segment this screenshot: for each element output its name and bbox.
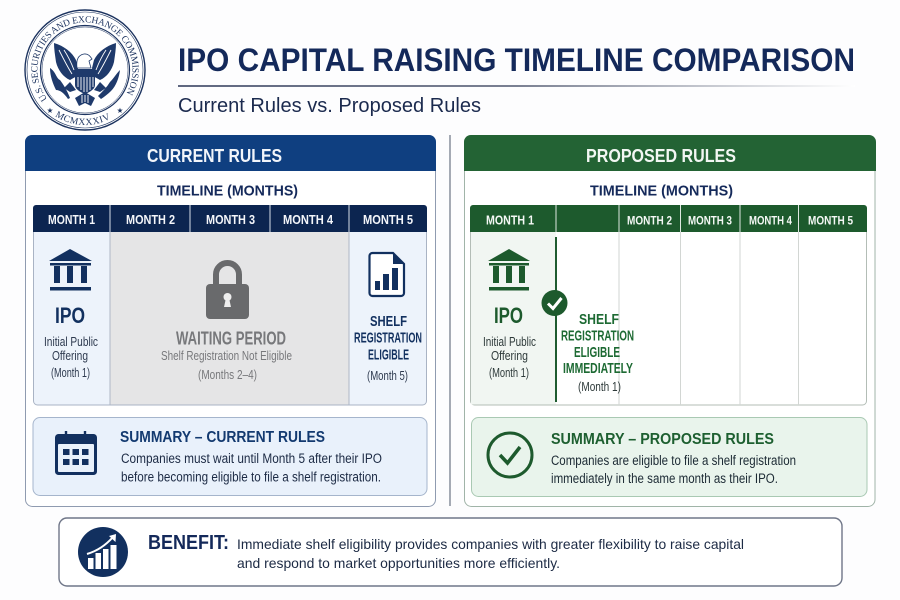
summary: proposed rules: Companies are eligible to file a shelf registration [551,453,796,468]
callout: benefit: Immediate shelf eligibility provides companies with greater flexibility to raise capital [237,536,744,552]
waiting period label: WAITING PERIOD [176,328,286,348]
panel: current rules [25,135,436,506]
heading: timeline: TIMELINE (MONTHS) [590,182,733,200]
header: proposed rules: PROPOSED RULES [586,145,736,166]
eagle [50,43,120,106]
month header bar [470,205,867,232]
waiting period label [161,328,292,382]
shelf eligible label: SHELF [370,313,407,330]
IPO label: Initial Public [483,335,536,349]
icon: bank [488,249,530,290]
month header bar: MONTH 2 [126,213,175,227]
callout: benefit [59,518,842,586]
shelf eligible immediately label [561,311,634,394]
shelf eligible label: (Month 5) [367,369,408,383]
header: proposed rules [464,135,876,171]
month header bar: MONTH 5 [363,213,413,227]
shelf eligible label: ELIGIBLE [368,346,409,364]
header: current rules [25,135,436,171]
shelf eligible immediately label: IMMEDIATELY [563,360,633,377]
logo: SEC seal: ★ [117,106,124,115]
subtitle: Current Rules vs. Proposed Rules [178,94,481,117]
month header bar: MONTH 1 [48,213,95,227]
shelf eligible immediately label: ELIGIBLE [574,344,620,361]
heading: timeline: TIMELINE (MONTHS) [157,182,298,200]
IPO label: (Month 1) [489,366,529,380]
summary: proposed rules: SUMMARY – PROPOSED RULES [551,431,774,448]
icon: document chart [370,253,404,296]
shelf eligible immediately label: (Month 1) [578,380,621,394]
month header bar [33,205,427,232]
month header bar: MONTH 4 [749,214,792,228]
IPO label [483,303,536,380]
summary: proposed rules [472,418,867,496]
month header bar: MONTH 3 [688,214,732,228]
callout: benefit: and respond to market opportunities more efficiently. [237,555,560,571]
icon: padlock [206,263,249,319]
summary: current rules: SUMMARY – CURRENT RULES [120,429,325,446]
summary: current rules: Companies must wait until Month 5 after their IPO [121,451,382,466]
month header bar: MONTH 1 [486,214,534,228]
icon: growth chart [78,527,128,577]
summary: proposed rules: immediately in the same month as their IPO. [551,471,778,486]
logo: SEC seal: ★ [47,106,54,115]
logo: SEC seal: MCMXXXIV [55,110,108,126]
month header bar: MONTH 4 [283,213,333,227]
IPO label [44,303,98,380]
icon: bank [49,249,92,290]
waiting period label: Shelf Registration Not Eligible [161,348,292,363]
panel: proposed rules [464,135,876,506]
waiting period label: (Months 2–4) [198,368,257,382]
IPO label: (Month 1) [51,366,90,380]
title: IPO CAPITAL RAISING TIMELINE COMPARISON [178,42,855,78]
shelf eligible label [354,313,422,383]
IPO label: Initial Public [44,335,98,349]
shelf eligible immediately label: SHELF [579,311,619,328]
IPO label: Offering [491,349,528,363]
IPO label: Offering [52,349,88,363]
IPO label: IPO [494,303,523,328]
shelf eligible label: REGISTRATION [354,330,422,346]
timeline body [470,225,866,405]
logo: SEC seal: U.S. SECURITIES AND EXCHANGE COMMISSION [31,16,139,102]
logo: SEC seal [24,9,146,131]
shelf eligible immediately label: REGISTRATION [561,328,634,344]
month header bar: MONTH 2 [627,214,672,228]
month header bar: MONTH 3 [206,213,255,227]
header: current rules: CURRENT RULES [147,145,282,166]
timeline body [34,225,426,405]
summary: current rules [33,418,427,496]
IPO label: IPO [55,303,85,328]
icon: calendar [55,431,97,475]
summary: current rules: before becoming eligible to file a shelf registration. [121,470,381,484]
month header bar: MONTH 5 [808,214,853,228]
icon: check circle [488,433,532,477]
icon: check badge [542,290,568,316]
callout: benefit: BENEFIT: [148,531,229,554]
